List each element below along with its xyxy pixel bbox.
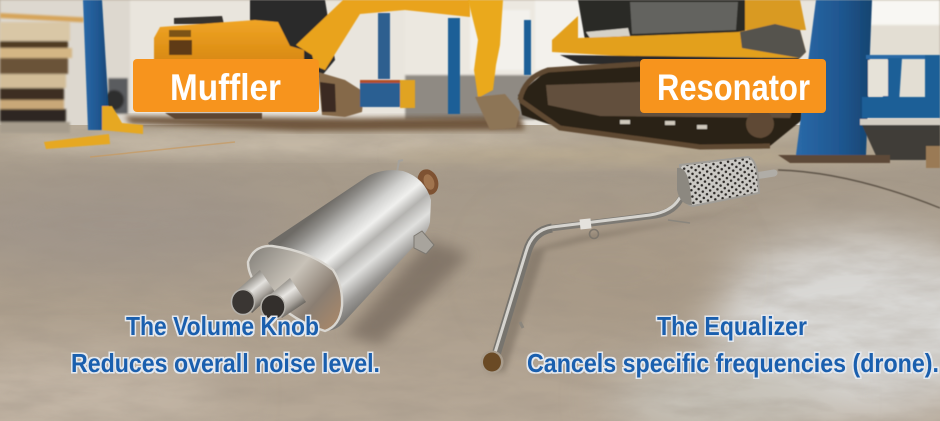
background: workshop wall [0, 0, 940, 135]
muffler product [232, 160, 470, 345]
muffler inlet flange [397, 160, 442, 198]
label: Resonator: Resonator [657, 67, 810, 108]
caption: muffler description: The Volume Knob [126, 311, 319, 341]
background: excavator arm and bucket [468, 0, 520, 130]
muffler end cap [248, 246, 342, 331]
label: Muffler [133, 59, 319, 112]
resonator outlet [755, 173, 774, 176]
muffler shadow [345, 240, 470, 345]
resonator perforated can [677, 157, 759, 206]
resonator pipe [494, 187, 690, 358]
muffler tailpipe right [261, 278, 306, 320]
muffler canister [268, 170, 431, 331]
caption: resonator description [527, 311, 939, 378]
caption: muffler description [71, 311, 380, 378]
background: blue lift column left [44, 0, 143, 149]
resonator tip [480, 350, 504, 374]
background: floor [0, 125, 940, 421]
background: dirt on floor [125, 116, 525, 131]
background: blue lift column right [778, 0, 940, 208]
background: excavator right [518, 0, 806, 148]
resonator product [480, 157, 774, 374]
label: Muffler: Muffler [170, 67, 281, 108]
caption: resonator description: The Equalizer [657, 311, 807, 341]
background: excavator left [154, 0, 531, 119]
label: Resonator [640, 59, 826, 113]
resonator shadow [488, 205, 760, 372]
background: storage shelves [0, 13, 84, 133]
muffler mounting bracket [414, 231, 434, 254]
muffler tailpipe left [232, 270, 275, 314]
caption: muffler description: Reduces overall noise level. [71, 348, 380, 378]
